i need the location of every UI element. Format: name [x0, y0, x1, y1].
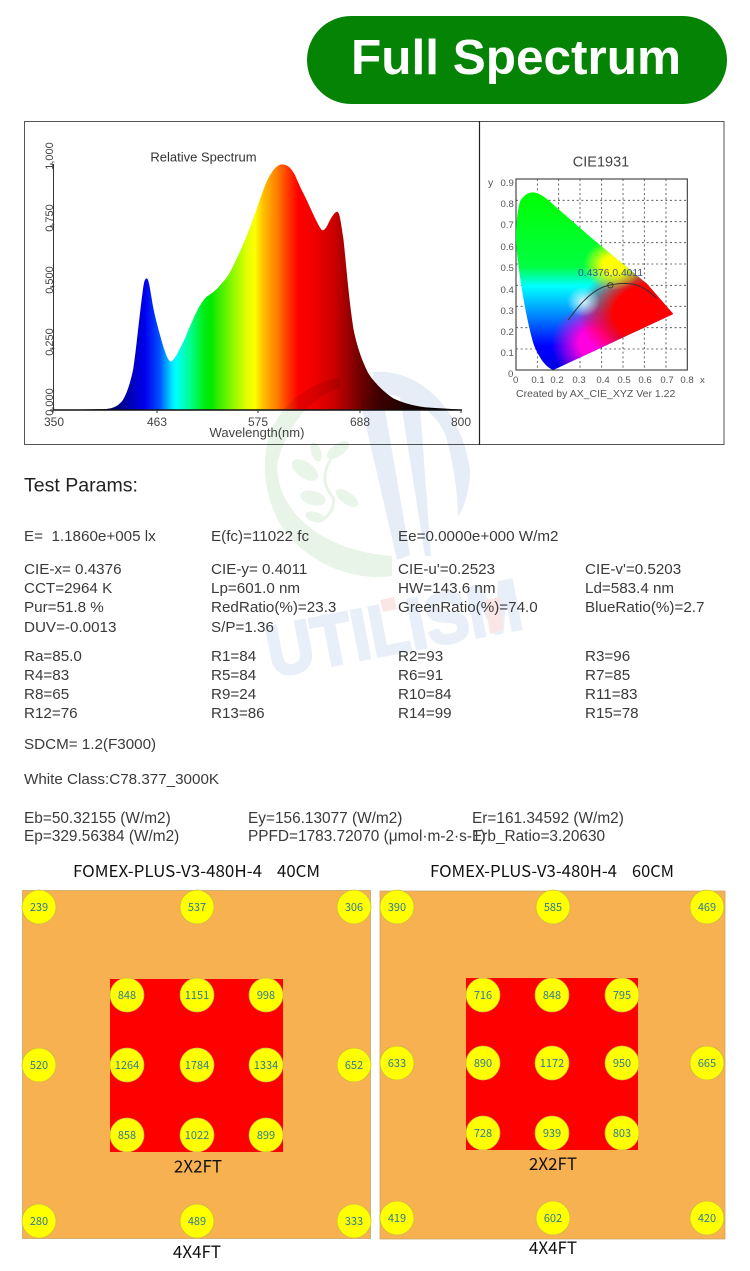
CIE axis labels: 0.3: [500, 306, 514, 317]
text block: white class: White Class:C78.377_3000K: [24, 771, 219, 788]
text block: illuminance: [24, 528, 558, 545]
text block: colour parameters: S/P=1.36: [211, 619, 274, 636]
text block: irradiance and PPFD: Ep=329.56384 (W/m2): [24, 828, 179, 845]
text block: rendering indices: Ra=85.0: [24, 648, 82, 665]
text block: irradiance and PPFD: PPFD=1783.72070 (μmol·m-2·s-1): [248, 828, 486, 845]
y axis labels: 1,000: [44, 142, 56, 170]
x axis labels: 463: [147, 415, 167, 429]
CIE axis labels: 0.8: [500, 199, 514, 210]
text block: SDCM: SDCM= 1.2(F3000): [24, 736, 156, 753]
CIE axis labels: 0.8: [680, 375, 694, 386]
CIE title: CIE1931: [573, 154, 629, 170]
text block: rendering indices: R10=84: [398, 686, 452, 703]
CIE axis labels: 0: [508, 369, 513, 380]
text block: rendering indices: R1=84: [211, 648, 256, 665]
panel: PPFD map at 40CM: 239: [30, 899, 48, 915]
text block: rendering indices: R15=78: [585, 705, 639, 722]
x axis labels: 350: [44, 415, 64, 429]
chart: CIE1931 chromaticity diagram: [488, 156, 705, 400]
y axis labels: 0,250: [44, 328, 56, 356]
text block: colour parameters: CIE-u'=0.2523: [398, 561, 495, 578]
text block: illuminance: E(fc)=11022 fc: [211, 528, 309, 545]
map heading 60CM: 60CM: [632, 858, 674, 882]
text block: illuminance: E= 1.1860e+005 lx: [24, 528, 156, 545]
y axis labels: 0,000: [44, 388, 56, 416]
x axis labels: 800: [451, 415, 471, 429]
text block: rendering indices: R5=84: [211, 667, 256, 684]
CIE axis labels: 0.2: [500, 327, 514, 338]
text block: irradiance and PPFD: Erb_Ratio=3.20630: [472, 828, 605, 845]
CIE axis labels: 0.1: [531, 375, 545, 386]
text block: rendering indices: R9=24: [211, 686, 256, 703]
CIE axis labels: 0.7: [500, 220, 514, 231]
CIE axis labels: x: [700, 375, 705, 386]
chart: relative spectrum: [44, 142, 471, 440]
text block: rendering indices: R12=76: [24, 705, 78, 722]
panel: PPFD map at 40CM: 1264: [115, 1057, 139, 1073]
CIE axis labels: 0.5: [500, 263, 514, 274]
CIE axis labels: 0: [513, 375, 518, 386]
panel: PPFD map at 60CM: 419: [388, 1210, 406, 1226]
CIE axis labels: 0.1: [500, 348, 514, 359]
text block: rendering indices: R6=91: [398, 667, 443, 684]
panel: PPFD map at 40CM: 1151: [185, 987, 209, 1003]
y axis labels: 0,750: [44, 204, 56, 232]
title banner: Full Spectrum: Full Spectrum: [351, 30, 681, 85]
CIE axis labels: 0.3: [572, 375, 586, 386]
text block: colour parameters: DUV=-0.0013: [24, 619, 116, 636]
text block: rendering indices: R13=86: [211, 705, 265, 722]
panel: PPFD map at 60CM: 602: [544, 1210, 562, 1226]
panel: PPFD map at 60CM: 890: [474, 1055, 492, 1071]
panel: PPFD map at 40CM: 652: [345, 1057, 363, 1073]
text block: irradiance and PPFD: Ey=156.13077 (W/m2): [248, 810, 402, 827]
map heading 60CM: FOMEX-PLUS-V3-480H-4: [430, 858, 617, 882]
panel: PPFD map at 60CM: 665: [698, 1055, 716, 1071]
panel: PPFD map at 40CM: 537: [188, 899, 206, 915]
CIE axis labels: 0.9: [500, 178, 514, 189]
panel: PPFD map at 60CM: 803: [613, 1125, 631, 1141]
coordinate annotation: 0.4376,0.4011: [578, 268, 643, 279]
panel: PPFD map at 40CM: 280: [30, 1213, 48, 1229]
text block: colour parameters: CIE-y= 0.4011: [211, 561, 307, 578]
CIE axis labels: 0.4: [596, 375, 610, 386]
CIE axis labels: 0.6: [500, 242, 514, 253]
panel: PPFD map at 60CM: 469: [698, 899, 716, 915]
CIE axis labels: [488, 177, 705, 400]
panel: PPFD map at 60CM: 728: [474, 1125, 492, 1141]
x axis labels: 575: [248, 415, 268, 429]
panel: PPFD map at 60CM: 585: [544, 899, 562, 915]
panel: PPFD map at 40CM: 520: [30, 1057, 48, 1073]
text block: colour parameters: HW=143.6 nm: [398, 580, 496, 597]
text block: rendering indices: R14=99: [398, 705, 452, 722]
panel: PPFD map at 60CM: 390: [388, 899, 406, 915]
text block: rendering indices: [24, 648, 639, 722]
panel: PPFD map at 60CM: 2X2FT: [529, 1150, 577, 1175]
panel: PPFD map at 40CM: 1334: [254, 1057, 278, 1073]
panel: PPFD map at 40CM: 899: [257, 1127, 275, 1143]
title banner: Full Spectrum: [307, 16, 727, 104]
text block: colour parameters: RedRatio(%)=23.3: [211, 599, 336, 616]
text block: irradiance and PPFD: [24, 810, 624, 845]
CIE axis labels: Created by AX_CIE_XYZ Ver 1.22: [516, 388, 676, 400]
text block: colour parameters: Ld=583.4 nm: [585, 580, 674, 597]
y axis labels: 0,500: [44, 266, 56, 294]
panel: PPFD map at 60CM: 848: [543, 987, 561, 1003]
text block: illuminance: Ee=0.0000e+000 W/m2: [398, 528, 558, 545]
text block: rendering indices: R7=85: [585, 667, 630, 684]
CIE axis labels: 0.4: [500, 285, 515, 296]
map heading 40CM: 40CM: [277, 858, 320, 882]
panel: PPFD map at 40CM: 1784: [185, 1057, 209, 1073]
heading: Test Params: Test Params:: [24, 476, 138, 496]
panel: PPFD map at 40CM: 848: [118, 987, 136, 1003]
panel: PPFD map at 60CM: [380, 858, 725, 1259]
chart title: Relative Spectrum: [150, 150, 257, 164]
watermark logo: [260, 372, 528, 693]
text block: colour parameters: Pur=51.8 %: [24, 599, 104, 616]
text block: rendering indices: R11=83: [585, 686, 638, 703]
text block: colour parameters: CCT=2964 K: [24, 580, 112, 597]
panel: PPFD map at 60CM: 716: [474, 987, 492, 1003]
panel: PPFD map at 60CM: 939: [543, 1125, 561, 1141]
CIE axis labels: 0.6: [638, 375, 652, 386]
text block: colour parameters: GreenRatio(%)=74.0: [398, 599, 538, 616]
panel: PPFD map at 60CM: 4X4FT: [529, 1234, 577, 1259]
blackbody locus curve: [568, 283, 657, 320]
panel: PPFD map at 40CM: 4X4FT: [173, 1238, 221, 1263]
panel: PPFD map at 40CM: 998: [257, 987, 275, 1003]
panel: spectrum and CIE charts frame: [24, 121, 724, 445]
panel: PPFD map at 60CM: 795: [613, 987, 631, 1003]
panel: PPFD map at 40CM: 1022: [185, 1127, 209, 1143]
CIE axis labels: 0.5: [617, 375, 631, 386]
text block: rendering indices: R4=83: [24, 667, 69, 684]
x axis labels: 688: [350, 415, 370, 429]
text block: rendering indices: R3=96: [585, 648, 630, 665]
panel: PPFD map at 40CM: 306: [345, 899, 363, 915]
text block: irradiance and PPFD: Eb=50.32155 (W/m2): [24, 810, 171, 827]
panel: PPFD map at 40CM: 858: [118, 1127, 136, 1143]
panel: PPFD map at 40CM: 2X2FT: [174, 1152, 222, 1178]
x axis labels: [44, 415, 471, 440]
panel: PPFD map at 40CM: [22, 858, 371, 1263]
text block: colour parameters: BlueRatio(%)=2.7: [585, 599, 704, 616]
text block: colour parameters: Lp=601.0 nm: [211, 580, 300, 597]
x axis labels: Wavelength(nm): [210, 425, 304, 440]
panel: PPFD map at 40CM: 333: [345, 1213, 363, 1229]
panel: PPFD map at 60CM: 633: [388, 1055, 406, 1071]
y axis labels: [44, 142, 56, 416]
panel: PPFD map at 60CM: 950: [613, 1055, 631, 1071]
text block: colour parameters: CIE-x= 0.4376: [24, 561, 122, 578]
panel: PPFD map at 40CM: 489: [188, 1213, 206, 1229]
text block: rendering indices: R2=93: [398, 648, 443, 665]
map heading 40CM: FOMEX-PLUS-V3-480H-4: [73, 858, 262, 882]
text block: colour parameters: CIE-v'=0.5203: [585, 561, 681, 578]
text block: rendering indices: R8=65: [24, 686, 69, 703]
text block: irradiance and PPFD: Er=161.34592 (W/m2): [472, 810, 624, 827]
CIE axis labels: y: [488, 177, 494, 189]
CIE axis labels: 0.7: [660, 375, 674, 386]
text block: colour parameters: [24, 561, 704, 636]
watermark logo: UTILISM: [260, 565, 528, 693]
CIE axis labels: 0.2: [550, 375, 564, 386]
panel: PPFD map at 60CM: 1172: [540, 1055, 564, 1071]
panel: PPFD map at 60CM: 420: [698, 1210, 716, 1226]
